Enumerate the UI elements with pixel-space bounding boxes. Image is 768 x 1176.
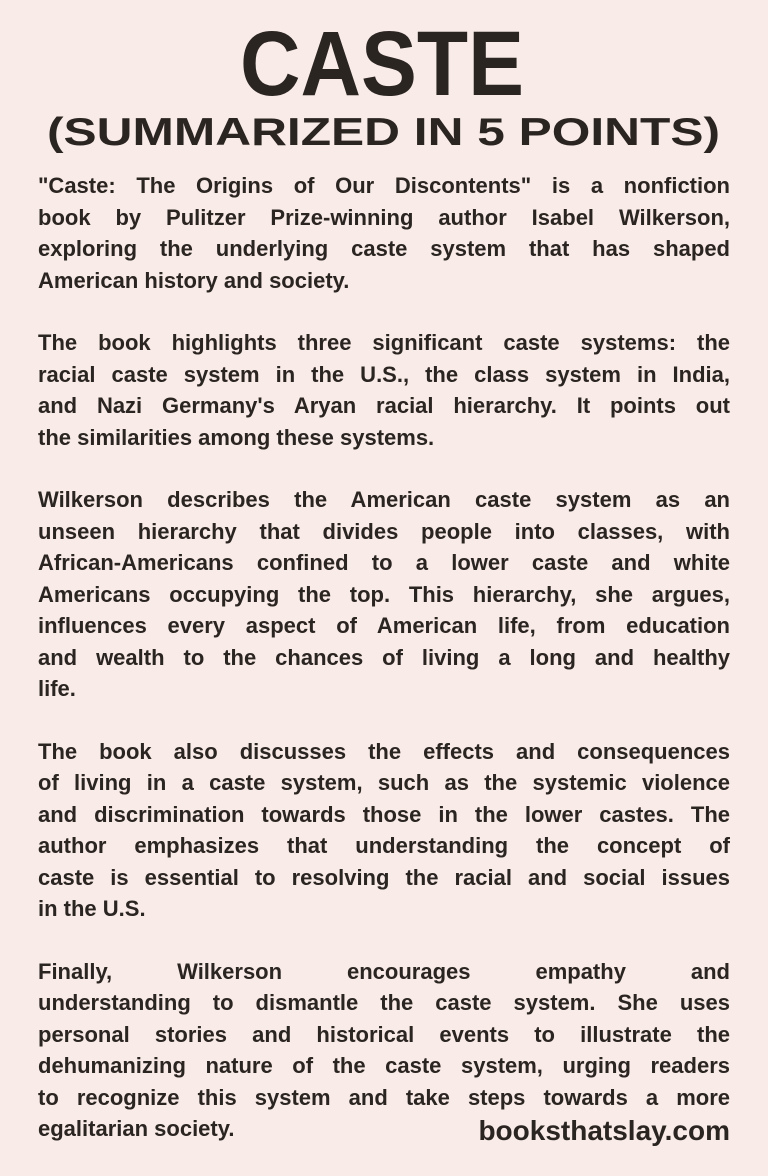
paragraph 5: understanding to dismantle the caste system. She uses <box>38 990 730 1015</box>
paragraph 2 <box>38 330 730 450</box>
paragraph 3: life. <box>38 676 76 701</box>
paragraph 4: and discrimination towards those in the lower castes. The <box>38 802 730 826</box>
paragraph 5: personal stories and historical events to illustrate the <box>38 1022 730 1046</box>
paragraph 2: racial caste system in the U.S., the class system in India, <box>38 362 730 386</box>
paragraph 4: caste is essential to resolving the racial and social issues <box>38 864 730 890</box>
paragraph 3: African-Americans confined to a lower caste and white <box>38 550 730 575</box>
title <box>47 13 720 154</box>
paragraph 3: Americans occupying the top. This hierarchy, she argues, <box>38 582 730 606</box>
paragraph 5: Finally, Wilkerson encourages empathy and <box>38 958 730 984</box>
paragraph 1: American history and society. <box>38 268 349 292</box>
footer website: booksthatslay.com <box>478 1115 730 1146</box>
paragraph 1: book by Pulitzer Prize-winning author Isabel Wilkerson, <box>38 204 730 230</box>
paragraph 2: The book highlights three significant caste systems: the <box>38 330 730 355</box>
paragraph 3: Wilkerson describes the American caste system as an <box>38 487 730 512</box>
paragraph 1: "Caste: The Origins of Our Discontents" is a nonfiction <box>38 173 730 198</box>
paragraph 5: dehumanizing nature of the caste system, urging readers <box>38 1053 730 1078</box>
body text <box>38 173 730 1141</box>
title: (SUMMARIZED IN 5 POINTS) <box>47 111 720 154</box>
paragraph 3: unseen hierarchy that divides people into classes, with <box>38 518 730 544</box>
paragraph 4: The book also discusses the effects and consequences <box>38 738 730 764</box>
paragraph 3: and wealth to the chances of living a long and healthy <box>38 644 730 670</box>
paragraph 5: to recognize this system and take steps towards a more <box>38 1084 730 1110</box>
paragraph 1: exploring the underlying caste system that has shaped <box>38 236 730 261</box>
paragraph 4: author emphasizes that understanding the concept of <box>38 833 730 858</box>
paragraph 2: the similarities among these systems. <box>38 424 434 450</box>
paragraph 3: influences every aspect of American life, from education <box>38 613 730 638</box>
paragraph 4: of living in a caste system, such as the systemic violence <box>38 770 730 795</box>
paragraph 2: and Nazi Germany's Aryan racial hierarchy. It points out <box>38 393 730 418</box>
paragraph 5: egalitarian society. <box>38 1116 234 1141</box>
title: CASTE <box>240 13 524 115</box>
paragraph 1 <box>38 173 730 292</box>
paragraph 5 <box>38 958 730 1141</box>
paragraph 4 <box>38 738 730 921</box>
paragraph 4: in the U.S. <box>38 896 146 921</box>
paragraph 3 <box>38 487 730 701</box>
